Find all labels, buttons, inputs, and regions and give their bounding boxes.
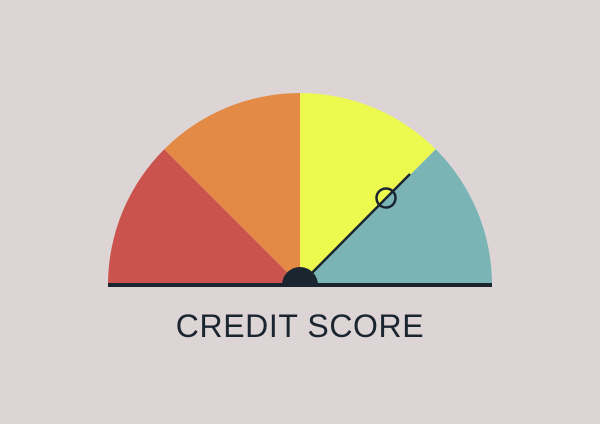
segment: yellow <box>300 93 436 285</box>
needle <box>300 174 410 285</box>
segment: teal <box>300 149 492 285</box>
title: CREDIT SCORE <box>176 308 424 344</box>
baseline <box>108 283 492 287</box>
segment: orange <box>164 93 300 285</box>
hub <box>282 267 318 285</box>
segment: red <box>108 149 300 285</box>
